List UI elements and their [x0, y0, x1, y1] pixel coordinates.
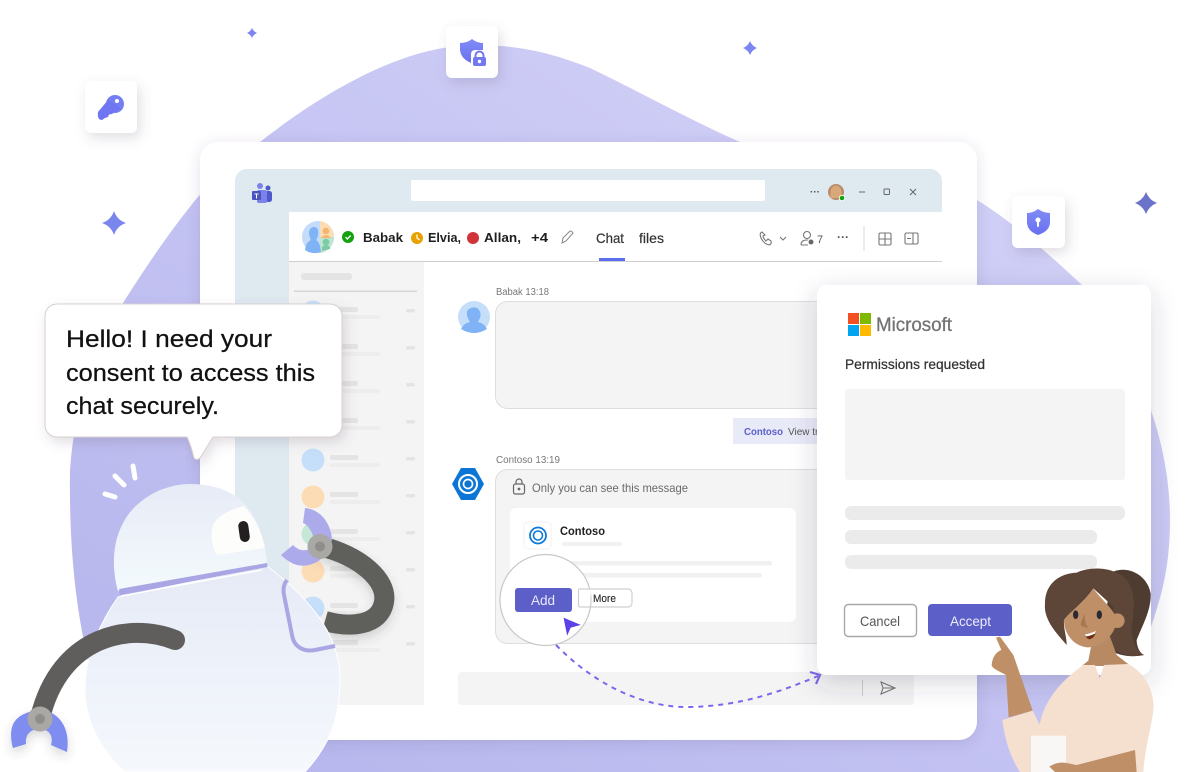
message chip: Contoso view: View tr	[788, 427, 819, 438]
icon card: shield with keyhole	[1012, 196, 1065, 248]
presence and participant names: +4	[531, 230, 549, 245]
woman pointing at Accept	[992, 569, 1153, 772]
presence and participant names: Elvia,	[428, 230, 461, 245]
group avatar	[302, 221, 334, 253]
magnifier over Add button	[500, 554, 616, 646]
face	[1064, 588, 1125, 647]
tabs: files	[639, 230, 664, 246]
cursor	[563, 617, 582, 637]
app window frame	[200, 142, 977, 740]
message: Contoso card	[452, 455, 836, 644]
hair	[1045, 569, 1144, 656]
body	[85, 566, 340, 772]
neck	[1082, 637, 1131, 666]
message: Babak	[458, 287, 836, 408]
icon: lock	[514, 479, 524, 494]
chat header bar	[289, 212, 942, 262]
message: Contoso card: Contoso 13:19	[496, 455, 560, 466]
icon: pencil	[562, 231, 573, 243]
icon card: shield with lock	[446, 26, 498, 78]
dashed arrow: Add to permissions card	[556, 645, 820, 707]
permissions heading: Permissions requested	[845, 356, 985, 372]
presence and participant names	[342, 230, 549, 245]
more button edge	[578, 589, 591, 607]
header action icons	[760, 226, 918, 251]
arm	[992, 637, 1033, 717]
presence and participant names: Babak	[363, 230, 404, 245]
more button	[579, 589, 632, 607]
icon: Teams logo: T	[254, 194, 259, 200]
joints	[28, 534, 332, 732]
speech bubble: chat securely.	[66, 393, 219, 420]
speech bubble: Hello! I need your	[66, 326, 272, 353]
cancel button	[844, 604, 916, 636]
message chip: Contoso view: Contoso	[744, 427, 783, 438]
excitement ticks	[105, 466, 135, 497]
icon: Teams logo	[252, 183, 272, 203]
sleeve	[1002, 711, 1040, 772]
cancel button: Cancel	[860, 613, 900, 629]
magnifier over Add button: More	[593, 593, 616, 605]
adaptive card: Contoso	[560, 526, 605, 538]
permissions card	[817, 285, 1151, 675]
header action icons: ···	[837, 230, 849, 244]
tabs: Chat	[596, 230, 624, 246]
forearm	[1049, 750, 1137, 772]
head	[114, 484, 268, 596]
presence and participant names: Allan,	[484, 230, 521, 245]
Microsoft logo	[848, 313, 953, 336]
blouse	[1023, 664, 1153, 772]
sidebar chat list	[289, 262, 424, 705]
icon: Contoso hexagon	[452, 468, 484, 500]
message chip: Contoso view	[733, 418, 833, 444]
more button: More	[593, 593, 616, 605]
paper	[1031, 736, 1066, 772]
Microsoft logo: Microsoft	[876, 315, 953, 336]
tabs	[596, 230, 664, 261]
arm panel outline	[283, 580, 335, 650]
search box	[411, 180, 765, 201]
ponytail	[1107, 570, 1151, 656]
header action icons: 7	[817, 234, 823, 246]
sparkles	[102, 28, 1157, 235]
add button: Add	[531, 593, 555, 608]
title bar and rail	[235, 169, 942, 705]
robot	[11, 466, 384, 772]
accept button: Accept	[950, 613, 991, 629]
message input bar	[458, 672, 914, 705]
speech bubble	[45, 304, 342, 460]
near arm	[40, 633, 175, 718]
icon card: key	[85, 81, 137, 133]
speech bubble: consent to access this	[66, 360, 315, 387]
message: Contoso card: Only you can see this message	[532, 481, 688, 495]
placeholder content	[845, 389, 1125, 569]
near claw	[11, 710, 68, 752]
window controls: ···	[810, 187, 820, 198]
accept button	[928, 604, 1012, 636]
adaptive card	[510, 508, 796, 622]
message: Babak: Babak 13:18	[496, 287, 549, 298]
window controls	[810, 184, 916, 201]
far arm and claw	[281, 508, 384, 625]
